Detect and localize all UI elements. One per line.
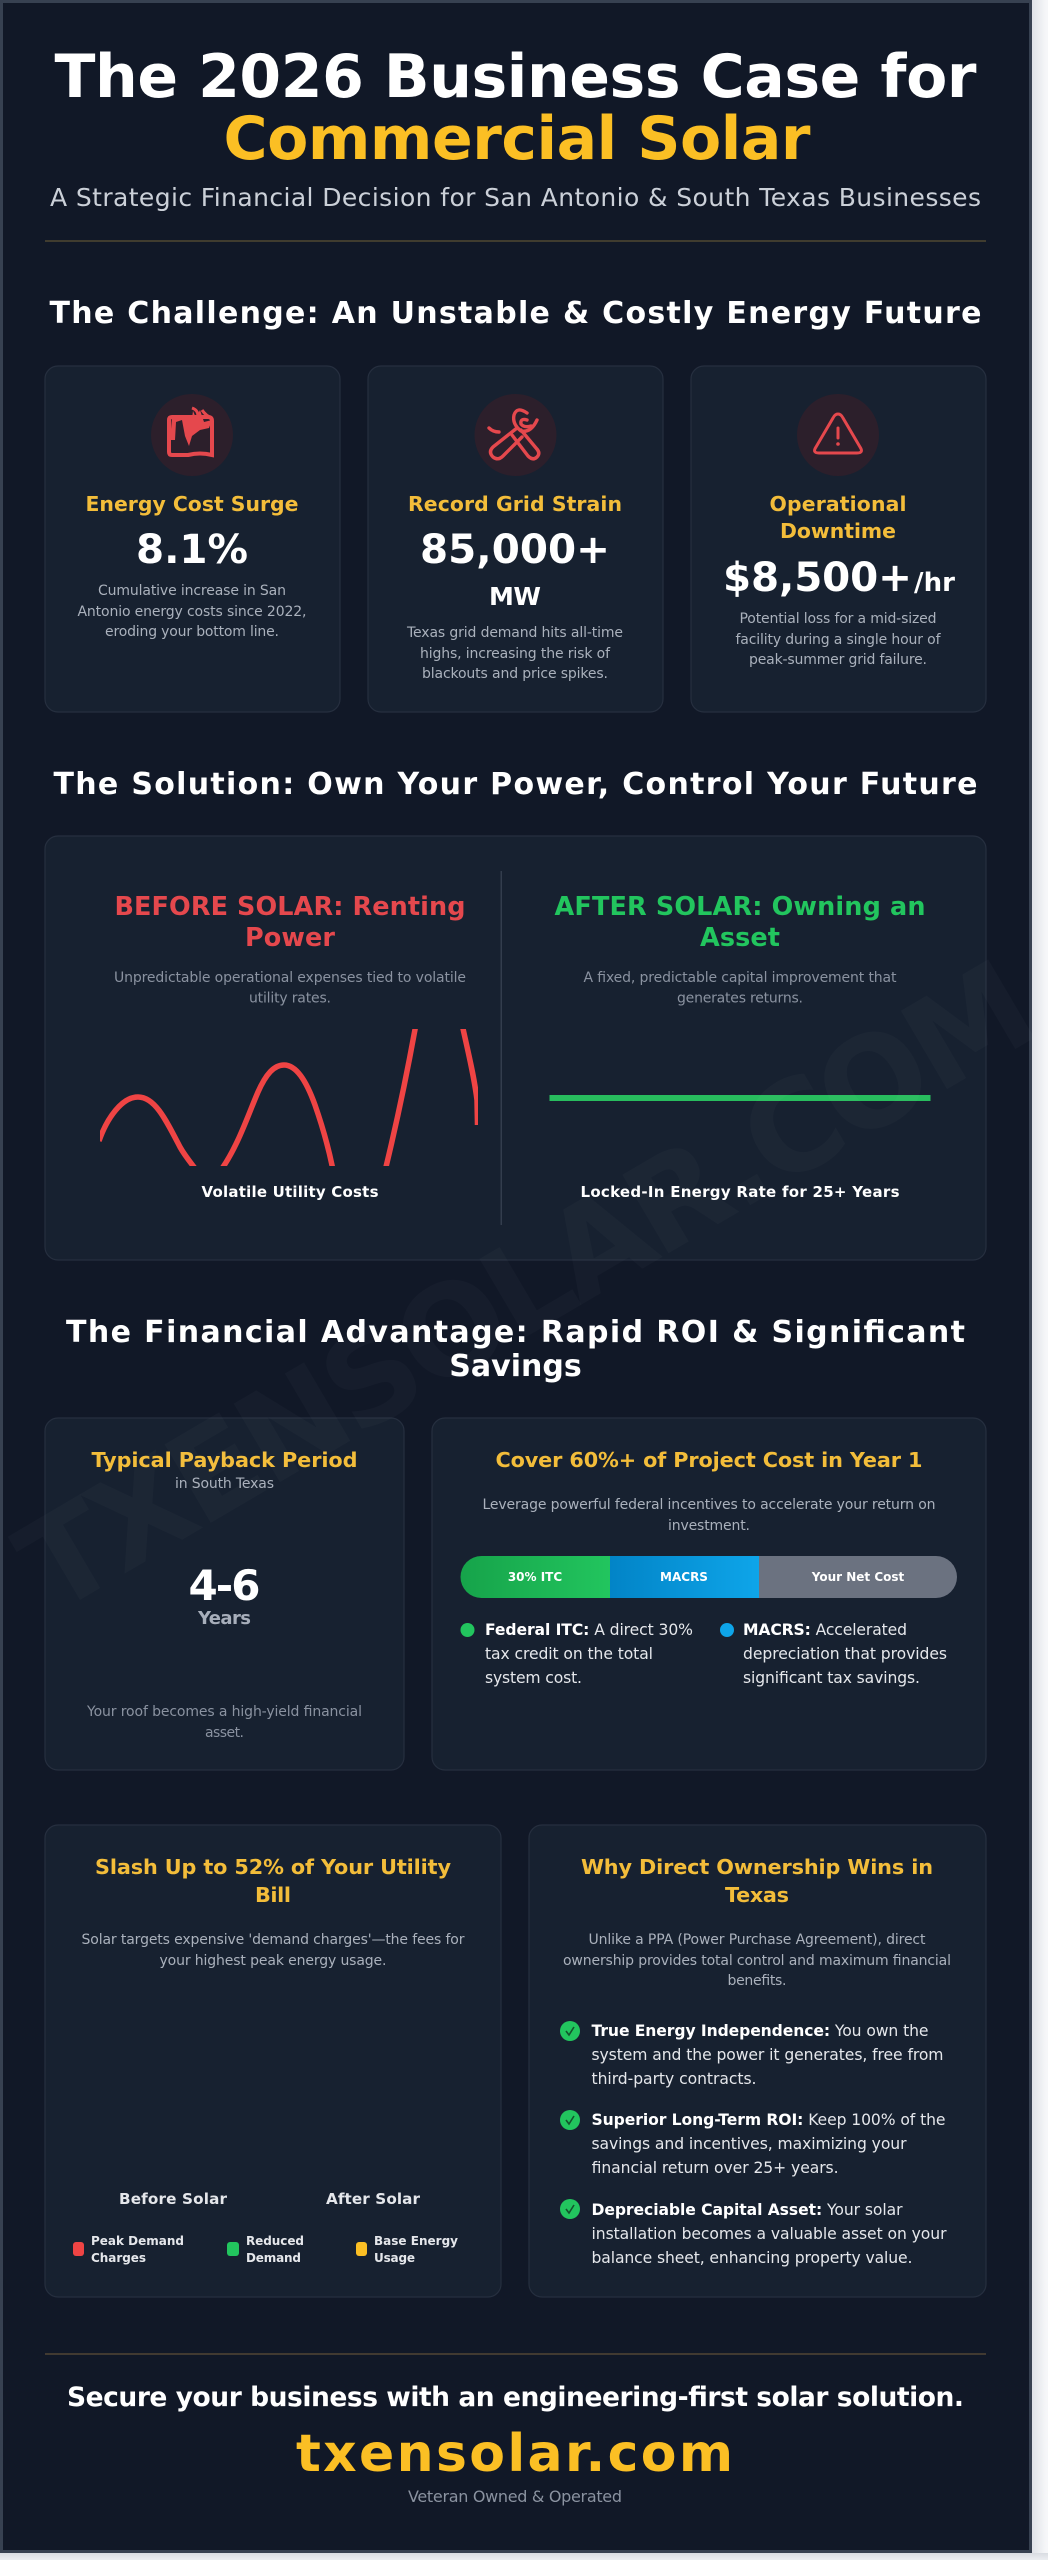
legend: Usage [374,2251,415,2265]
checklist item: capital asset [560,2199,947,2267]
icon: warning triangle [797,394,879,476]
after solar heading [554,892,926,953]
checklist item: energy independence: True Energy Independence: You own the [592,2022,928,2040]
after solar description: A fixed, predictable capital improvement that [584,970,897,986]
sublabel: in South Texas [175,1476,274,1492]
chart: flat rate line [550,1095,930,1101]
footer note: Veteran Owned & Operated [408,2487,622,2506]
description [406,625,623,682]
checklist item: capital asset: balance sheet, enhancing property value. [592,2249,912,2267]
chart: volatile cost line [99,1024,478,1171]
description: Cumulative increase in San [98,583,286,599]
heading: the challenge: The Challenge: An Unstable & Costly Energy Future [50,296,982,331]
lede [82,1932,465,1969]
heading [770,492,906,543]
after solar description [584,970,897,1006]
footer url: txensolar.com [296,2424,733,2484]
description [86,1704,362,1741]
after solar description: generates returns. [677,990,803,1006]
heading: Cover 60%+ of Project Cost in Year 1 [496,1448,922,1472]
bullet: macrs: significant tax savings. [743,1669,920,1687]
heading [581,1855,933,1907]
checklist item: capital asset: installation becomes a valuable asset on your [592,2225,947,2243]
heading: the financial advantage: The Financial Advantage: Rapid ROI & Significant [66,1315,965,1350]
heading: the financial advantage: Savings [449,1349,582,1384]
legend: Reduced [246,2234,304,2248]
lede: Leverage powerful federal incentives to accelerate your return on [482,1497,936,1513]
heading: Why Direct Ownership Wins in [581,1855,933,1879]
panel: energy cost surge [45,366,340,712]
stat: 8.1% [136,525,248,573]
heading: Bill [255,1883,291,1907]
heading: Typical Payback Period [92,1448,358,1472]
heading: the financial advantage [66,1315,965,1384]
bullet: macrs: MACRS: Accelerated [743,1621,907,1639]
title: The 2026 Business Case for [54,42,977,112]
checklist item: capital asset: Depreciable Capital Asset: Your solar [592,2201,903,2219]
heading: the solution: The Solution: Own Your Power, Control Your Future [54,767,978,802]
footer divider [45,2353,986,2355]
stat: MW [489,582,541,611]
heading: Operational [770,492,906,516]
lede: investment. [668,1518,750,1534]
panel: utility bill savings [45,1825,501,2297]
chart labels [119,2190,420,2208]
checklist item: long-term roi: savings and incentives, maximizing your [592,2135,907,2153]
stat: 4-6 [188,1561,260,1610]
description: Potential loss for a mid-sized [740,611,936,627]
panel: direct ownership [529,1825,986,2297]
before solar description: utility rates. [249,990,331,1006]
panel: project cost coverage [432,1418,986,1770]
stacked bar: 30% ITC [508,1570,562,1584]
before solar description: Unpredictable operational expenses tied to volatile [114,970,466,986]
lede: your highest peak energy usage. [160,1953,386,1969]
bullet: macrs [720,1621,947,1687]
after solar heading: Asset [700,923,780,953]
bullet: federal itc: Federal ITC: A direct 30% [485,1621,693,1639]
description: blackouts and price spikes. [422,666,608,682]
panel: before and after comparison [45,836,986,1260]
description: facility during a single hour of [736,632,942,648]
bullet: federal itc: tax credit on the total [485,1645,653,1663]
before solar description [114,970,466,1006]
icon: burning dollar bill [151,394,233,476]
stat: $8,500+ [723,553,912,601]
lede: ownership provides total control and maximum financial [563,1953,951,1969]
checklist item: long-term roi [560,2110,946,2177]
watermark: TXENSOLAR.COM [0,933,1048,1641]
stat: 85,000+ [420,525,610,573]
before solar heading: Power [245,923,335,953]
legend: Charges [91,2251,146,2265]
stacked bar: MACRS [660,1570,708,1584]
description: Your roof becomes a high-yield financial [86,1704,362,1720]
title [54,42,977,174]
stat: Years [197,1608,251,1629]
chart labels: After Solar [326,2190,420,2208]
header divider [45,240,986,242]
title: Commercial Solar [224,104,811,174]
description [736,611,942,668]
description: Antonio energy costs since 2022, [78,604,306,620]
legend: Demand [246,2251,301,2265]
before solar heading [114,892,466,953]
heading: Texas [725,1883,789,1907]
heading: Record Grid Strain [408,492,622,516]
checklist item: long-term roi: financial return over 25+ years. [592,2159,839,2177]
bullet: macrs: depreciation that provides [743,1645,947,1663]
legend: Peak Demand [91,2234,184,2248]
description: Texas grid demand hits all-time [406,625,623,641]
caption: locked-in rate: Locked-In Energy Rate for 25+ Years [580,1183,900,1201]
description: peak-summer grid failure. [749,652,927,668]
description: highs, increasing the risk of [420,646,611,662]
description: asset. [205,1725,244,1741]
icon: crossed tools [474,394,556,476]
footer tagline: Secure your business with an engineering-first solar solution. [67,2382,964,2413]
panel: record grid strain [368,366,663,712]
heading: Downtime [780,519,896,543]
bullet: federal itc [460,1621,693,1687]
lede [563,1932,951,1989]
checklist item: long-term roi: Superior Long-Term ROI: Keep 100% of the [592,2111,946,2129]
checklist item: energy independence [560,2021,944,2088]
subtitle: A Strategic Financial Decision for San Antonio & South Texas Businesses [50,183,981,212]
checklist item: energy independence: third-party contracts. [592,2070,756,2088]
legend: Base Energy [374,2234,458,2248]
chart labels: Before Solar [119,2190,228,2208]
panel: payback period [45,1418,404,1770]
lede: Unlike a PPA (Power Purchase Agreement), direct [588,1932,926,1948]
stat [420,525,610,611]
lede: benefits. [728,1973,786,1989]
caption: volatile utility costs: Volatile Utility Costs [202,1183,379,1201]
after solar heading: AFTER SOLAR: Owning an [554,892,926,922]
stat: /hr [914,568,955,598]
before solar heading: BEFORE SOLAR: Renting [114,892,466,922]
heading [95,1855,451,1907]
description: eroding your bottom line. [105,624,279,640]
heading: Slash Up to 52% of Your Utility [95,1855,451,1879]
stacked bar: Your Net Cost [811,1570,905,1584]
lede: Solar targets expensive 'demand charges'—the fees for [82,1932,465,1948]
lede [482,1497,936,1534]
description [78,583,306,640]
heading: Energy Cost Surge [86,492,298,516]
panel: operational downtime [691,366,986,712]
stacked bar [460,1556,958,1598]
checklist item: energy independence: system and the power it generates, free from [592,2046,944,2064]
bullet: federal itc: system cost. [485,1669,582,1687]
legend [73,2234,458,2265]
